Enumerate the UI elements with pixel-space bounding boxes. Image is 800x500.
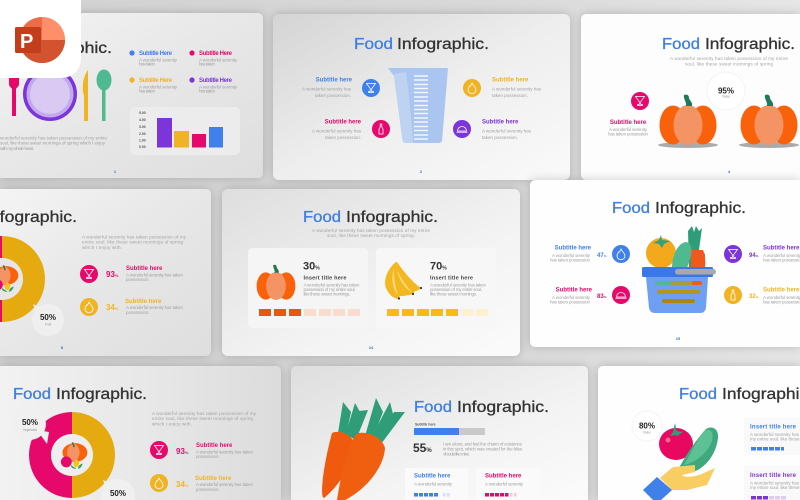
title: Food	[662, 36, 700, 53]
stat: 55%: of souls like mine.	[443, 452, 470, 456]
legend: four subtitles: has taken	[139, 62, 155, 66]
slide 7: full donut	[0, 366, 281, 500]
bar chart	[130, 107, 240, 155]
slide 8: carrots	[291, 366, 588, 500]
item: 47%: A wonderful serenity	[552, 253, 591, 258]
stat: 93%: A wonderful serenity has taken	[126, 272, 183, 278]
item: 83%: has taken possession	[550, 300, 590, 304]
card: pumpkin 30%: like these sweet mornings.	[304, 292, 350, 296]
callout: 50% fruit: Fruit	[45, 322, 51, 326]
item: 32%	[724, 286, 800, 304]
stat: 93%: possession.	[196, 454, 220, 459]
title: Infographic.	[20, 40, 112, 57]
title	[354, 36, 489, 53]
intro text: soul, like these sweet mornings of spring	[685, 62, 773, 66]
stat: 55%	[413, 441, 523, 456]
item: purple: Subtitle here	[482, 120, 519, 126]
paragraph	[152, 411, 257, 426]
pumpkin right	[739, 95, 799, 148]
item: 32%: Subtitle here	[763, 288, 800, 294]
icon: fork	[9, 78, 19, 116]
item: pink subtitle: has taken possession	[608, 132, 648, 136]
item: pink: Subtitle here	[325, 120, 362, 126]
card: pink subtitle	[476, 468, 540, 500]
card: insert title blue	[744, 418, 800, 455]
title	[679, 386, 800, 403]
card: blue subtitle	[405, 468, 468, 500]
item: pink	[312, 120, 390, 140]
icon: tomato	[659, 423, 693, 460]
page number: 14	[369, 345, 374, 350]
page number: 1	[114, 169, 117, 174]
stat: 34%: A wonderful serenity has taken	[196, 482, 253, 487]
intro text	[312, 228, 430, 238]
intro text	[670, 56, 788, 66]
item: 47%: 47%	[597, 253, 607, 259]
card: insert title blue: my entire soul, like these	[750, 436, 800, 442]
item: purple	[453, 120, 532, 140]
item: purple: taken possession.	[482, 135, 518, 140]
bar chart: 2.00	[139, 132, 146, 136]
item: 94%: A wonderful serenity	[763, 253, 800, 258]
item: purple: A wonderful serenity has	[482, 128, 532, 134]
intro text: A wonderful serenity has taken possession of my entire	[670, 56, 788, 61]
bar chart: 0.00	[139, 145, 146, 149]
icon: knife	[83, 70, 88, 121]
stat: 93%: A wonderful serenity has taken	[196, 450, 253, 454]
callout: 95%: Value	[722, 94, 730, 98]
item: 83%: A wonderful serenity	[552, 295, 591, 300]
slide 2: measuring beaker	[273, 14, 570, 180]
title: Food	[612, 200, 650, 217]
item: blue	[302, 78, 380, 98]
stat: 34%: Subtitle here	[195, 476, 232, 482]
body paragraph	[0, 136, 107, 151]
legend: four subtitles: has taken	[199, 88, 215, 94]
item: pink: taken possession.	[325, 135, 361, 140]
card: pumpkin 30%: possession of my entire soul,	[304, 287, 356, 292]
stat: 34%: possession.	[196, 487, 220, 492]
card: pink subtitle: A wonderful serenity	[485, 482, 524, 486]
stat: 93%: Subtitle here	[126, 266, 163, 272]
icon: pumpkin	[257, 265, 295, 300]
legend: four subtitles: has taken	[139, 88, 155, 94]
stat: 34%	[80, 298, 183, 316]
stat: 55%: 55%	[413, 441, 432, 455]
icon: spoon	[96, 70, 112, 121]
item: 32%: A wonderful serenity	[763, 295, 800, 300]
callout: 95%: 95%	[718, 86, 734, 96]
title	[612, 200, 746, 217]
item: 94%: Subtitle here	[763, 246, 800, 252]
stat: 93%: 93%	[106, 270, 119, 279]
paragraph: A wonderful serenity has taken possession of my	[152, 411, 257, 416]
card: pumpkin 30%: A wonderful serenity has taken	[304, 282, 360, 288]
callout: 50% vegetable	[14, 408, 49, 444]
slide 6: vegetable basket	[530, 180, 800, 347]
title: Infographic.	[346, 209, 438, 226]
card: insert title purple: Insert title here	[750, 473, 797, 479]
title	[662, 36, 795, 53]
paragraph	[82, 234, 187, 250]
title	[303, 209, 438, 226]
card: blue subtitle: A wonderful serenity	[414, 482, 453, 486]
body paragraph: soul, like these sweet mornings of spring which I enjoy	[0, 140, 106, 146]
donut chart	[0, 236, 45, 322]
stat: 34%: possession.	[126, 310, 150, 315]
icon: plate	[23, 67, 77, 121]
icon: basket with vegetables	[642, 226, 716, 313]
slide 9: hand with vegetables	[598, 366, 800, 500]
stat: 34%: Subtitle here	[125, 299, 162, 305]
bar chart: 1.00	[139, 138, 146, 142]
callout: 80%: Value	[643, 430, 651, 434]
page number: 8	[61, 345, 64, 350]
item: blue: A wonderful serenity has	[302, 86, 352, 92]
stat: 34%: A wonderful serenity has taken	[126, 305, 183, 310]
page number: 15	[676, 336, 681, 341]
item: 83%: 83%	[597, 294, 607, 300]
callout: 50% vegetable: 50%	[22, 418, 38, 427]
paragraph: which I enjoy with.	[82, 245, 122, 250]
item: yellow	[463, 78, 542, 98]
legend: four subtitles: Subtitle Here	[199, 51, 233, 57]
icon: beaker	[388, 68, 448, 143]
stat: 55%: in this spot, which was created for the bliss	[443, 446, 523, 452]
title	[414, 399, 549, 416]
bar chart: 5.00	[139, 111, 146, 115]
item: 83%: Subtitle here	[556, 288, 593, 294]
item: pink: A wonderful serenity has	[312, 128, 362, 134]
body paragraph: with my whole heart.	[0, 146, 34, 151]
callout: 80%	[632, 411, 662, 441]
card: pink subtitle: Subtitle here	[485, 474, 522, 480]
card: insert title purple	[744, 466, 800, 500]
legend: four subtitles: has taken	[199, 62, 215, 66]
stat: 34%	[150, 474, 253, 492]
callout: 50% fruit: 50%	[40, 313, 56, 322]
stat: 93%: Subtitle here	[196, 443, 233, 449]
legend: four subtitles: A wonderful serenity	[199, 84, 238, 90]
paragraph: which I enjoy with.	[152, 422, 192, 426]
title: Food	[13, 386, 51, 403]
legend: four subtitles: A wonderful serenity	[139, 84, 178, 90]
item: yellow: taken possession.	[492, 93, 528, 98]
callout: 50% vegetable: Vegetable	[23, 428, 37, 432]
card: insert title blue: Insert title here	[750, 424, 797, 430]
legend: four subtitles: A wonderful serenity	[139, 58, 178, 62]
stat: 34%: 34%	[176, 480, 189, 489]
title: Food	[354, 36, 393, 53]
legend: four subtitles	[129, 50, 238, 94]
item: 94%	[724, 245, 800, 263]
title: Infographic.	[655, 200, 746, 217]
paragraph: entire soul, like these sweet mornings of spring	[82, 240, 183, 244]
card: banana 70%: possession of my entire soul,	[430, 287, 482, 292]
title: Food	[679, 386, 717, 403]
slide 1: cutlery and bar chart	[0, 13, 263, 178]
callout: 95%	[707, 72, 745, 110]
item: blue: Subtitle here	[316, 78, 353, 84]
item: 47%: Subtitle here	[555, 246, 592, 252]
progress bar: Subtitle here	[415, 422, 436, 426]
title: Food	[414, 399, 452, 416]
card: banana 70%: 70%	[430, 260, 447, 272]
item: 47%	[550, 245, 630, 263]
item: pink subtitle: Subtitle here	[610, 120, 647, 126]
body paragraph: wonderful serenity has taken possession of my entire	[0, 136, 107, 140]
donut chart	[29, 412, 115, 498]
callout: 50% fruit	[32, 304, 64, 336]
icon: hand	[643, 465, 715, 500]
card: blue subtitle: Subtitle here	[414, 474, 451, 480]
card: banana 70%: like these sweet mornings.	[430, 292, 477, 296]
title: Food	[303, 209, 341, 226]
stat: 93%: possession.	[126, 277, 150, 282]
title: Infographic.	[397, 36, 489, 53]
stat: 55%: I am alone, and feel the charm of existence	[443, 442, 522, 446]
item: pink subtitle	[608, 92, 649, 136]
icon: carrots	[322, 398, 405, 500]
title: Infographic.	[705, 36, 795, 53]
slide 3: pumpkins	[581, 14, 800, 180]
icon: PowerPoint logo: P	[20, 31, 33, 53]
card: pumpkin 30%: Insert title here	[304, 276, 346, 282]
item: blue: taken possession.	[315, 93, 351, 98]
slide 4: half-cropped donut	[0, 189, 211, 356]
item: 47%: has taken possession	[550, 258, 590, 262]
title: Infographic.	[457, 399, 549, 416]
item: yellow: A wonderful serenity has	[492, 86, 542, 92]
pumpkin left	[658, 95, 718, 148]
intro text: soul, like these sweet mornings of spring.	[327, 233, 415, 238]
card: banana 70%: A wonderful serenity has taken	[430, 282, 486, 288]
slide 5: pumpkin and banana cards	[222, 189, 520, 356]
legend: four subtitles: A wonderful serenity	[199, 58, 238, 62]
bar chart: 4.00	[139, 118, 146, 122]
legend: four subtitles: Subtitle Here	[139, 51, 173, 57]
page number: 4	[728, 169, 731, 174]
paragraph: A wonderful serenity has taken possession of my	[82, 234, 187, 240]
callout: 50% fruit: 50%	[110, 489, 126, 498]
item: 32%: 32%	[749, 294, 759, 300]
stat: 93%	[80, 265, 183, 283]
bar chart: 3.00	[139, 125, 146, 129]
PowerPoint badge	[0, 0, 81, 78]
icon: cucumber	[680, 427, 718, 473]
callout: 50% fruit	[101, 479, 135, 500]
card: pumpkin 30%: 30%	[303, 260, 320, 272]
title	[13, 386, 147, 403]
paragraph: entire soul, like these sweet mornings of spring	[152, 416, 253, 421]
item: pink subtitle: A wonderful serenity	[609, 127, 648, 132]
callout: 80%: 80%	[639, 422, 655, 430]
intro text: A wonderful serenity has taken possession of my entire	[312, 228, 430, 233]
card: pumpkin 30%	[248, 248, 368, 328]
card: banana 70%: Insert title here	[430, 276, 473, 282]
stat: 34%: 34%	[106, 303, 119, 312]
stat: 93%: 93%	[176, 447, 189, 456]
stat: 93%	[150, 441, 253, 459]
legend: four subtitles: Subtitle Here	[199, 78, 233, 84]
page number: 2	[420, 169, 423, 174]
icon: bananas	[385, 262, 422, 300]
item: yellow: Subtitle here	[492, 78, 529, 84]
item: 94%: 94%	[749, 253, 759, 259]
item: 83%	[550, 286, 630, 304]
progress bar	[414, 422, 485, 435]
legend: four subtitles: Subtitle Here	[139, 78, 173, 84]
title: Infographic.	[56, 386, 147, 403]
card: banana 70%	[376, 248, 496, 328]
card: insert title purple: my entire soul, like these	[750, 485, 800, 490]
